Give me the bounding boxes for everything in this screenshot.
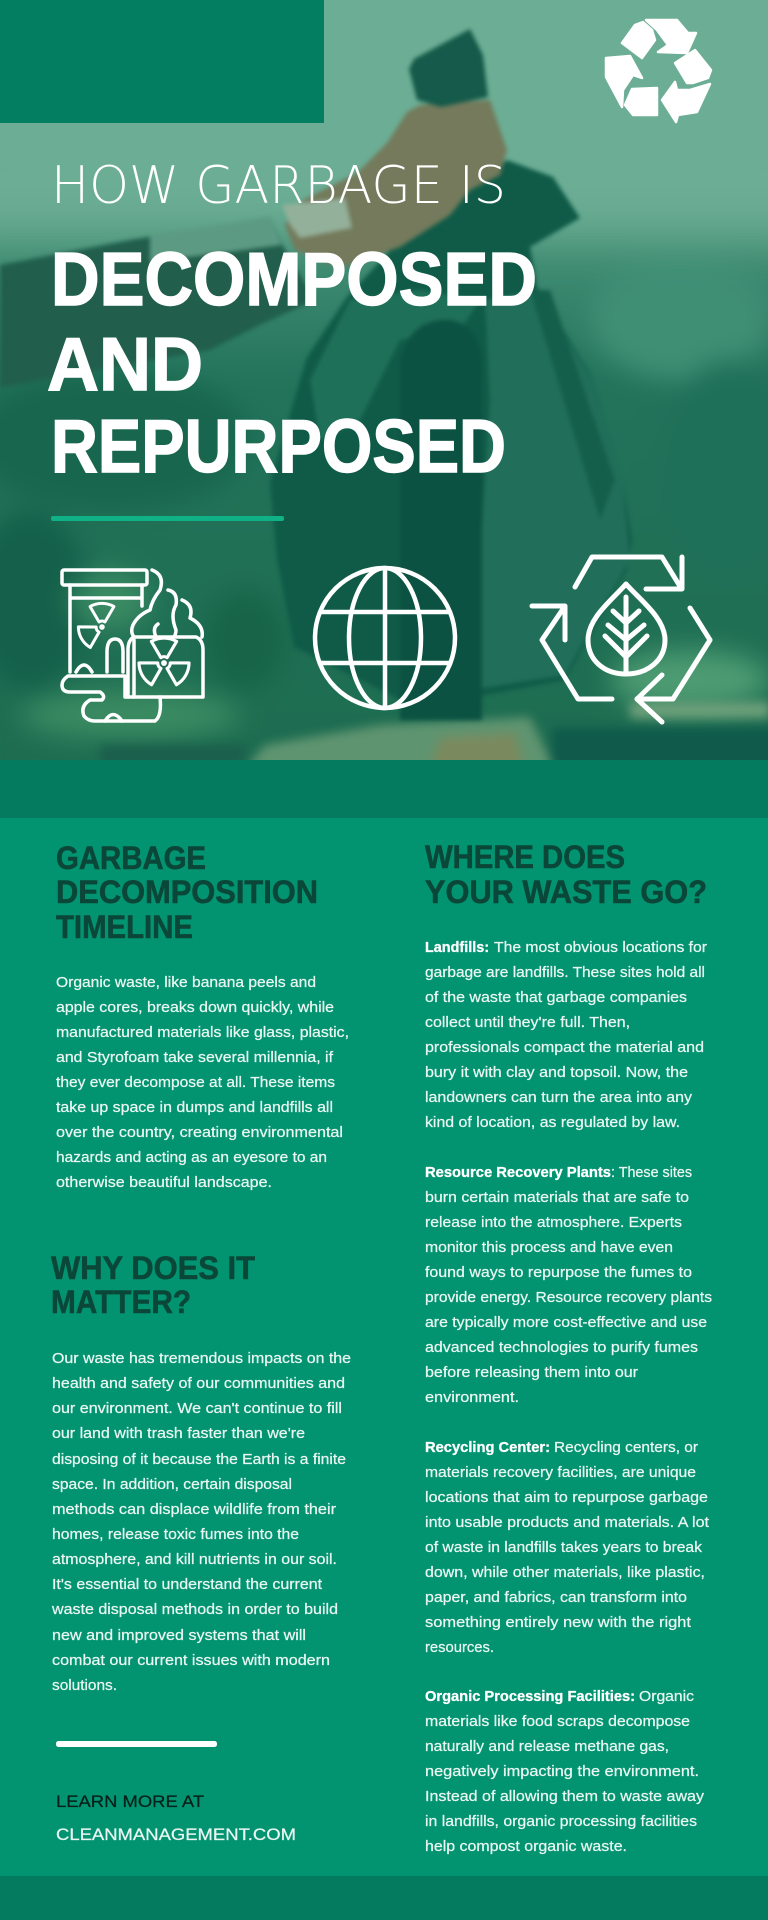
heading: DECOMPOSITION (56, 874, 318, 910)
text block: recycling center: Recycling Center: (425, 1439, 550, 1456)
paragraph: methods can displace wildlife from their (52, 1501, 336, 1518)
title (47, 156, 537, 488)
paragraph: apple cores, breaks down quickly, while (56, 999, 334, 1016)
text block: landfills: collect until they're full. Then, (425, 1014, 630, 1031)
paragraph (51, 1350, 351, 1694)
text block: landfills (425, 939, 707, 1131)
text block: organic processing facilities: negatively impacting the environment. (425, 1763, 699, 1780)
paragraph: Organic waste, like banana peels and (56, 974, 316, 991)
text block: resource recovery plants: before releasing them into our (425, 1364, 638, 1381)
heading: YOUR WASTE GO? (425, 874, 707, 910)
call to action (56, 1792, 296, 1844)
paragraph: hazards and acting as an eyesore to an (56, 1149, 327, 1166)
paragraph: space. In addition, certain disposal (52, 1476, 292, 1493)
text block: landfills: professionals compact the material and (425, 1039, 704, 1056)
heading: WHERE DOES (425, 839, 625, 875)
text block: landfills: kind of location, as regulated by law. (425, 1114, 680, 1131)
text block: landfills: Landfills: (425, 939, 489, 956)
text block: recycling center: something entirely new with the right (425, 1614, 692, 1631)
heading (425, 839, 707, 910)
paragraph: combat our current issues with modern (52, 1652, 330, 1669)
text block: landfills: bury it with clay and topsoil. Now, the (425, 1064, 688, 1081)
paragraph: disposing of it because the Earth is a finite (52, 1451, 346, 1468)
text block: resource recovery plants: provide energy. Resource recovery plants (425, 1289, 712, 1306)
text block: resource recovery plants: release into the atmosphere. Experts (425, 1214, 682, 1231)
paragraph (56, 974, 349, 1191)
title line: and: AND (47, 322, 203, 406)
text block: organic processing facilities: help compost organic waste. (425, 1838, 627, 1855)
title underline (51, 516, 284, 521)
band below hero (0, 760, 768, 818)
panel: where does your waste go (425, 839, 712, 1855)
icon: globe (315, 568, 455, 708)
text block: organic processing facilities: Organic (639, 1688, 695, 1705)
text block: resource recovery plants: found ways to repurpose the fumes to (425, 1264, 692, 1281)
icon: recycling loop with leaf (532, 557, 710, 722)
divider bar (56, 1741, 217, 1747)
title line: repurposed: REPURPOSED (51, 404, 506, 488)
text block: organic processing facilities: materials like food scraps decompose (425, 1713, 690, 1730)
paragraph: our land with trash faster than we're (52, 1425, 305, 1442)
text block: resource recovery plants: are typically more cost-effective and use (425, 1314, 707, 1331)
text block: resource recovery plants (425, 1164, 712, 1406)
cta line 2: website: CLEANMANAGEMENT.COM (56, 1825, 296, 1844)
title line: decomposed: DECOMPOSED (51, 237, 537, 321)
paragraph: atmosphere, and kill nutrients in our soil. (52, 1551, 337, 1568)
panel: garbage decomposition timeline (56, 840, 349, 1191)
top-left colour block (0, 0, 324, 123)
text block: recycling center: Recycling centers, or (554, 1439, 698, 1456)
icon: recycling symbol (606, 20, 711, 122)
heading: MATTER? (51, 1284, 191, 1320)
glove (285, 100, 507, 268)
heading: GARBAGE (56, 840, 206, 876)
text block: organic processing facilities: Instead of allowing them to waste away (425, 1788, 705, 1805)
icon: radioactive waste (62, 570, 203, 721)
garbage bag body (270, 160, 632, 708)
text block: resource recovery plants: monitor this process and have even (425, 1239, 673, 1256)
paragraph: take up space in dumps and landfills all (56, 1099, 333, 1116)
bag knot (409, 29, 488, 107)
text block: organic processing facilities: in landfills, organic processing facilities (425, 1813, 697, 1830)
text block: recycling center: resources. (425, 1639, 494, 1656)
heading (56, 840, 318, 945)
text block: organic processing facilities (425, 1688, 705, 1855)
paragraph: and Styrofoam take several millennia, if (56, 1049, 334, 1066)
heading: TIMELINE (56, 909, 193, 945)
heading: WHY DOES IT (51, 1250, 255, 1286)
paragraph: they ever decompose at all. These items (56, 1074, 335, 1091)
paragraph: manufactured materials like glass, plastic, (56, 1024, 349, 1041)
paragraph: homes, release toxic fumes into the (52, 1526, 299, 1543)
bottom band (0, 1876, 768, 1920)
text block: resource recovery plants: : These sites (611, 1164, 692, 1181)
forearm (0, 235, 306, 388)
body panel (0, 818, 768, 1876)
text block: resource recovery plants: environment. (425, 1389, 519, 1406)
text block: resource recovery plants: advanced technologies to purify fumes (425, 1339, 698, 1356)
text block: landfills: garbage are landfills. These sites hold all (425, 964, 705, 981)
paragraph: over the country, creating environmental (56, 1124, 343, 1141)
text block: recycling center: down, while other materials, like plastic, (425, 1564, 705, 1581)
text block: resource recovery plants: burn certain materials that are safe to (425, 1189, 689, 1206)
paragraph: waste disposal methods in order to build (51, 1601, 338, 1618)
text block: recycling center: paper, and fabrics, can transform into (425, 1589, 687, 1606)
text block: recycling center: into usable products and materials. A lot (425, 1514, 710, 1531)
text block: landfills: The most obvious locations for (494, 939, 707, 956)
paragraph: It's essential to understand the current (52, 1576, 323, 1593)
heading (51, 1250, 255, 1320)
text block: recycling center: materials recovery facilities, are unique (425, 1464, 696, 1481)
paragraph: solutions. (52, 1677, 117, 1694)
text block: organic processing facilities: naturally and release methane gas, (425, 1738, 669, 1755)
paragraph: our environment. We can't continue to fill (52, 1400, 342, 1417)
text block: resource recovery plants: Resource Recovery Plants (425, 1164, 611, 1181)
text block: landfills: of the waste that garbage companies (425, 989, 687, 1006)
text block: recycling center: of waste in landfills takes years to break (425, 1539, 703, 1556)
text block: recycling center: locations that aim to repurpose garbage (425, 1489, 708, 1506)
hero photo: hand lifting a garbage bag (0, 0, 768, 790)
paragraph: Our waste has tremendous impacts on the (52, 1350, 351, 1367)
text block: landfills: landowners can turn the area into any (425, 1089, 693, 1106)
panel: why does it matter (51, 1250, 351, 1694)
title line: how garbage is: HOW GARBAGE IS (51, 156, 506, 216)
cta line 1: LEARN MORE AT (56, 1792, 204, 1811)
paragraph: new and improved systems that will (52, 1627, 306, 1644)
paragraph: otherwise beautiful landscape. (56, 1174, 272, 1191)
text block: organic processing facilities: Organic Processing Facilities: (425, 1688, 635, 1705)
text block: recycling center (425, 1439, 710, 1656)
paragraph: health and safety of our communities and (52, 1375, 345, 1392)
